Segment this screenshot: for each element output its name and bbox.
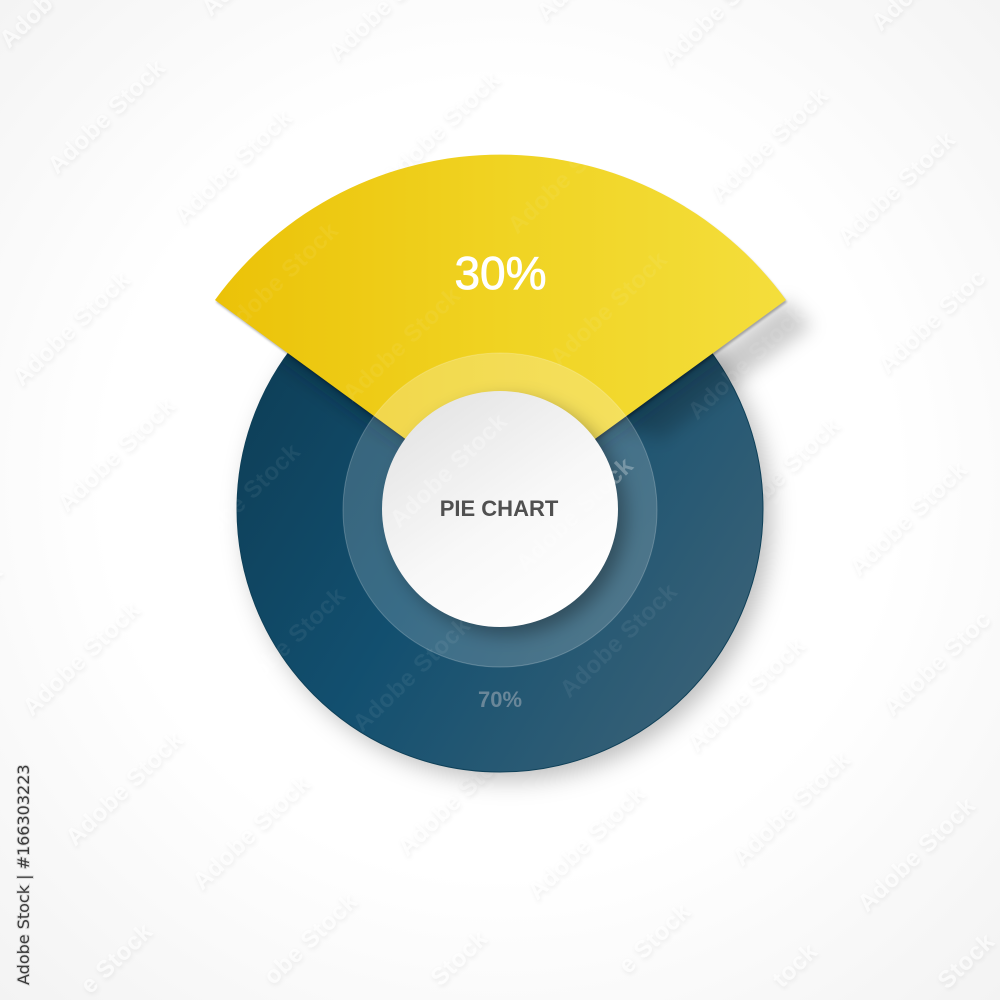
watermark pattern on background: Adobe Stock <box>378 66 506 191</box>
watermark pattern on background: Adobe Stock <box>853 792 981 917</box>
watermark pattern on background: Adobe Stock <box>393 736 521 861</box>
watermark pattern on background: e Stock <box>75 918 158 999</box>
watermark pattern on background: Stock <box>933 928 1000 994</box>
watermark pattern on background: Adobe Stock <box>43 54 171 179</box>
watermark pattern on background: tock <box>767 938 823 993</box>
watermark pattern on background: Adobe Stock <box>833 126 961 251</box>
watermark pattern on background: Adobe Stock <box>61 726 189 851</box>
watermark pattern on background: Adobe Stoc <box>873 264 992 379</box>
watermark pattern over chart: Adobe Stock <box>338 282 466 407</box>
watermark pattern over chart: Adobe Stock <box>555 578 683 703</box>
watermark pattern over chart <box>178 114 811 737</box>
watermark pattern on background: Adobe Stock <box>683 632 811 757</box>
pie segment: 70% blue donut <box>236 353 764 772</box>
watermark pattern on background: Adobe Stock <box>53 392 181 517</box>
watermark pattern on background: Adobe Stock <box>706 82 834 207</box>
watermark pattern on background: Adobe Stock <box>728 746 856 871</box>
center circle <box>382 391 618 627</box>
watermark pattern over chart: Adobe Stock <box>348 612 476 737</box>
center circle shadow <box>390 399 626 635</box>
watermark pattern on background: e Stock <box>613 898 696 979</box>
watermark pattern on background: Adobe Stock <box>8 266 136 391</box>
translucent inner ring <box>343 353 657 667</box>
watermark pattern over chart: Adobe Stock <box>385 408 513 533</box>
watermark pattern over chart: Adobe Stock <box>178 438 306 563</box>
watermark pattern on background: Adobe Stock <box>845 456 973 581</box>
watermark pattern on background: Adobe Stock <box>523 780 651 905</box>
vertical stock id text: Adobe Stock | #166303223 <box>14 764 33 985</box>
wedge shadow outside donut <box>620 300 812 440</box>
donut drop shadow <box>245 254 771 780</box>
watermark pattern over chart: Adobe Stock <box>503 114 631 239</box>
watermark pattern on background: Stock <box>426 925 493 991</box>
ring highlight inside the wedge <box>374 353 626 438</box>
wedge shadow on donut <box>282 354 718 448</box>
watermark pattern on background: Adobe Stock <box>18 596 146 721</box>
watermark pattern on background: Adobe Stoc <box>878 606 997 721</box>
watermark pattern over chart: Adobe Stock <box>545 246 673 371</box>
watermark pattern over chart: Adobe Stock <box>223 582 351 707</box>
watermark pattern over chart: Adobe Stock <box>216 217 344 342</box>
watermark pattern over chart: Adobe Stock <box>683 300 811 425</box>
pie segment: 30% yellow wedge <box>215 155 786 508</box>
watermark pattern on background: obe Stock <box>259 888 363 990</box>
watermark pattern on background: Adobe Stock <box>718 412 846 537</box>
label: 30%: 30% <box>454 247 547 299</box>
label: 70%: 70% <box>478 687 522 712</box>
watermark pattern over chart: Adobe Stock <box>511 452 639 577</box>
watermark pattern on background: Adobe Stock <box>188 770 316 895</box>
label: PIE CHART: PIE CHART <box>440 496 559 521</box>
watermark pattern on background: Adobe Stock <box>170 104 298 229</box>
